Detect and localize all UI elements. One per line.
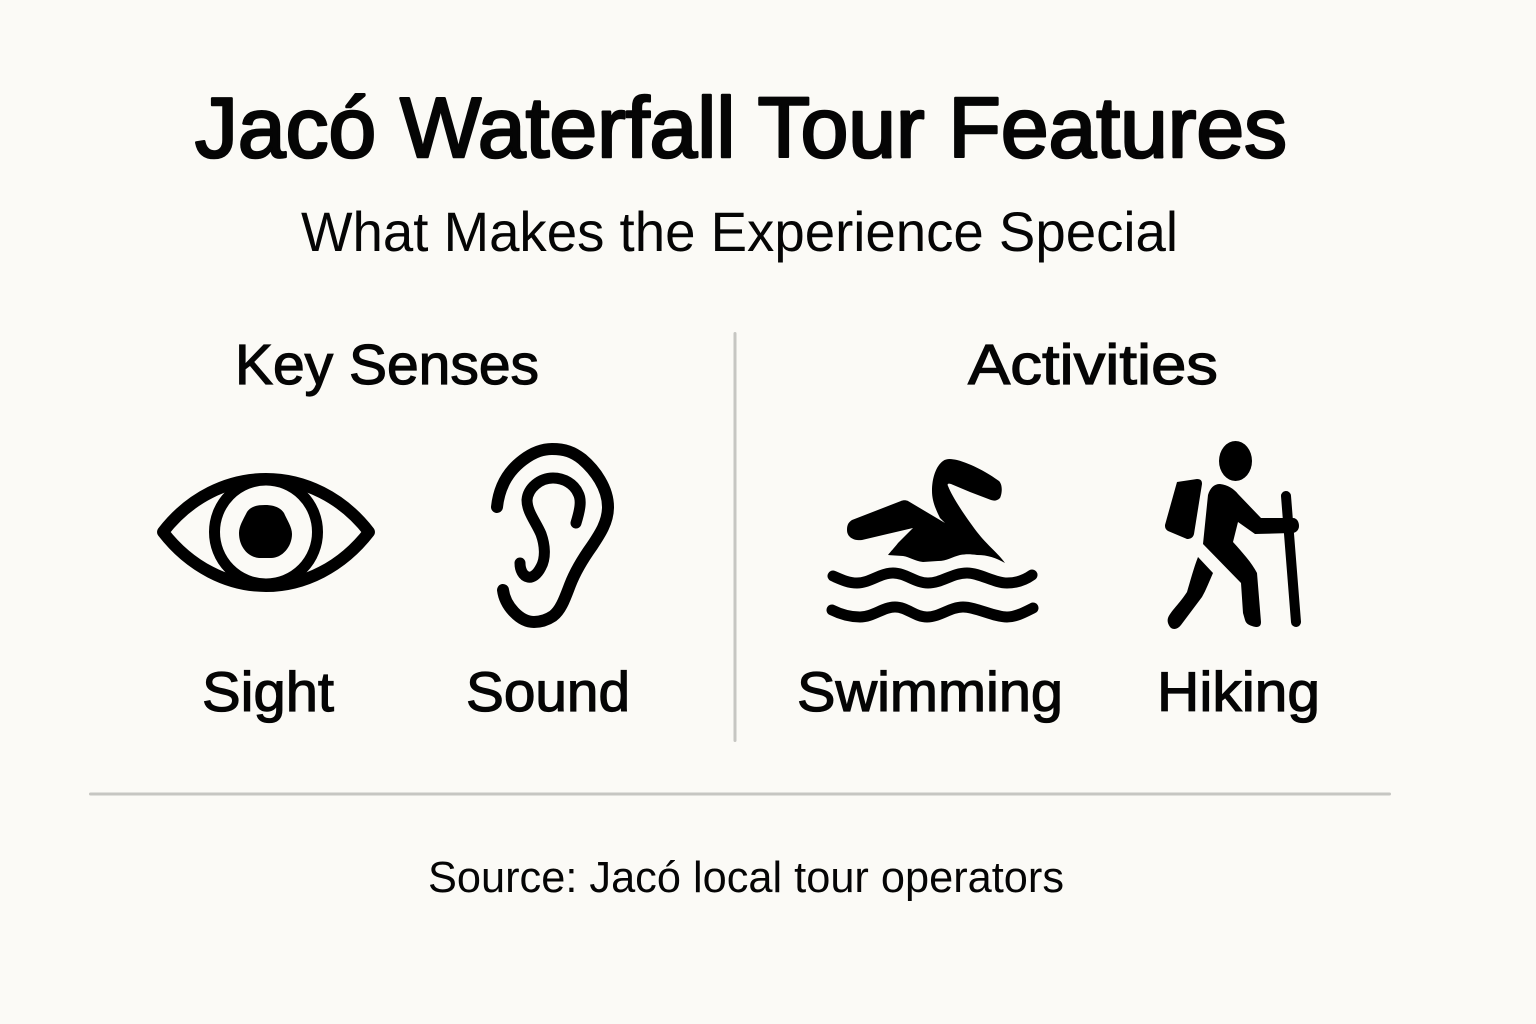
icon: hiker [1165, 441, 1299, 629]
label: hiking: Hiking [1157, 660, 1320, 723]
subtitle: What Makes the Experience Special [301, 200, 1178, 263]
label: sight: Sight [202, 660, 334, 723]
title: Jacó Waterfall Tour Features [195, 81, 1287, 176]
label: swimming: Swimming [797, 660, 1063, 723]
icon: swimmer [832, 459, 1033, 617]
heading: key senses: Key Senses [235, 333, 539, 397]
source note: Source: Jacó local tour operators [428, 853, 1064, 902]
icon: ear [497, 449, 608, 622]
icon: eye [163, 479, 369, 586]
label: sound: Sound [466, 660, 630, 723]
panel: key senses [163, 333, 630, 723]
heading: activities: Activities [968, 333, 1218, 397]
panel: activities [797, 333, 1320, 723]
